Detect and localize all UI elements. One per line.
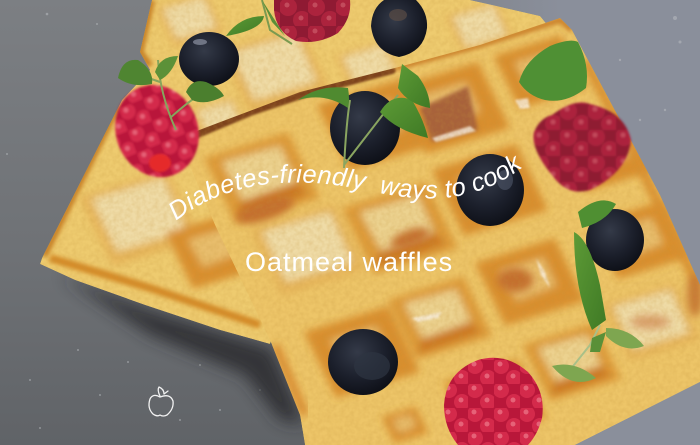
front waffle crumb texture (199, 33, 698, 444)
raspberry right (533, 102, 631, 192)
apple icon (149, 387, 173, 416)
caramel patch (420, 86, 478, 142)
blueberry top left (179, 32, 239, 86)
mint sprig centre (298, 64, 430, 168)
mint sprig top (226, 0, 292, 44)
raspberry top (274, 0, 350, 42)
top corner crust (395, 20, 572, 68)
back waffle crumb texture (42, 0, 539, 339)
raspberry left (114, 83, 200, 179)
right crust glow (585, 60, 698, 285)
mint sprig left (118, 56, 224, 130)
raspberry bottom (444, 358, 543, 445)
dark crust strip (176, 70, 392, 143)
blueberry right centre (456, 154, 524, 226)
back waffle (40, 0, 546, 344)
curved heading: Diabetes-friendly ways to cook (169, 156, 522, 220)
mint leaf large (519, 41, 587, 101)
front waffle pits (204, 35, 700, 443)
blueberry bottom (328, 329, 398, 395)
back waffle pits (79, 0, 515, 289)
blueberry far right (586, 209, 644, 271)
mint sprig right (552, 200, 644, 382)
back waffle crust edge (44, 0, 152, 256)
waffle shadow (60, 275, 305, 425)
blueberry centre (330, 91, 400, 165)
blueberry top (371, 0, 427, 57)
back waffle golden band (50, 258, 260, 325)
brown toasted patches (233, 191, 700, 329)
title: Oatmeal waffles (245, 247, 453, 277)
syrup highlights (412, 98, 550, 322)
front waffle (193, 1, 700, 445)
lower left crust glow (275, 345, 305, 415)
